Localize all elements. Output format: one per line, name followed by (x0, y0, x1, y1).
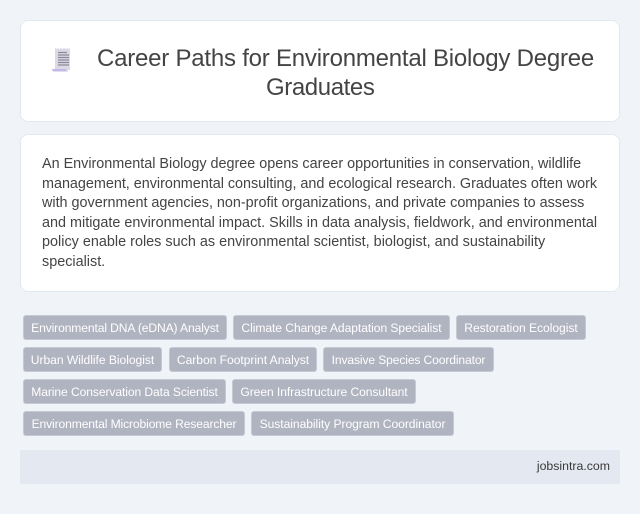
tag (232, 379, 416, 404)
tag: Environmental Microbiome Researcher (32, 417, 236, 431)
tag: Climate Change Adaptation Specialist (241, 321, 442, 335)
panel: description card (20, 134, 620, 292)
tag: Restoration Ecologist (464, 321, 578, 335)
description text: An Environmental Biology degree opens career opportunities in conservation, wildlife (42, 156, 581, 172)
tag: Green Infrastructure Consultant (240, 385, 408, 399)
tag: Marine Conservation Data Scientist (31, 385, 218, 399)
career tags (23, 315, 586, 436)
tag: Sustainability Program Coordinator (260, 417, 445, 431)
icon: document scroll (52, 48, 70, 72)
tag (23, 411, 245, 436)
description text: management, environmental consulting, and ecological research. Graduates often work (42, 176, 597, 192)
tag: Environmental DNA (eDNA) Analyst (31, 321, 219, 335)
tag (23, 315, 227, 340)
tag (233, 315, 450, 340)
tag (23, 347, 162, 372)
tag: Invasive Species Coordinator (332, 353, 485, 367)
tag (251, 411, 454, 436)
tag (169, 347, 317, 372)
description text: specialist. (42, 254, 105, 270)
title: Graduates (266, 74, 374, 101)
title: Career Paths for Environmental Biology Degree (97, 45, 594, 72)
tag: Urban Wildlife Biologist (31, 353, 154, 367)
footer bar (20, 450, 620, 484)
tag (456, 315, 586, 340)
tag: Carbon Footprint Analyst (177, 353, 309, 367)
tag (23, 379, 226, 404)
panel: title card (20, 20, 620, 122)
footer source text: jobsintra.com (537, 459, 610, 473)
description text (42, 156, 597, 270)
description text: policy enable roles such as environmental scientist, biologist, and sustainability (42, 234, 545, 250)
tag (323, 347, 494, 372)
title (97, 45, 594, 101)
description text: and mitigate environmental impact. Skills in data analysis, fieldwork, and environmental (42, 214, 597, 230)
description text: with government agencies, non-profit organizations, and private companies to assess (42, 195, 584, 211)
